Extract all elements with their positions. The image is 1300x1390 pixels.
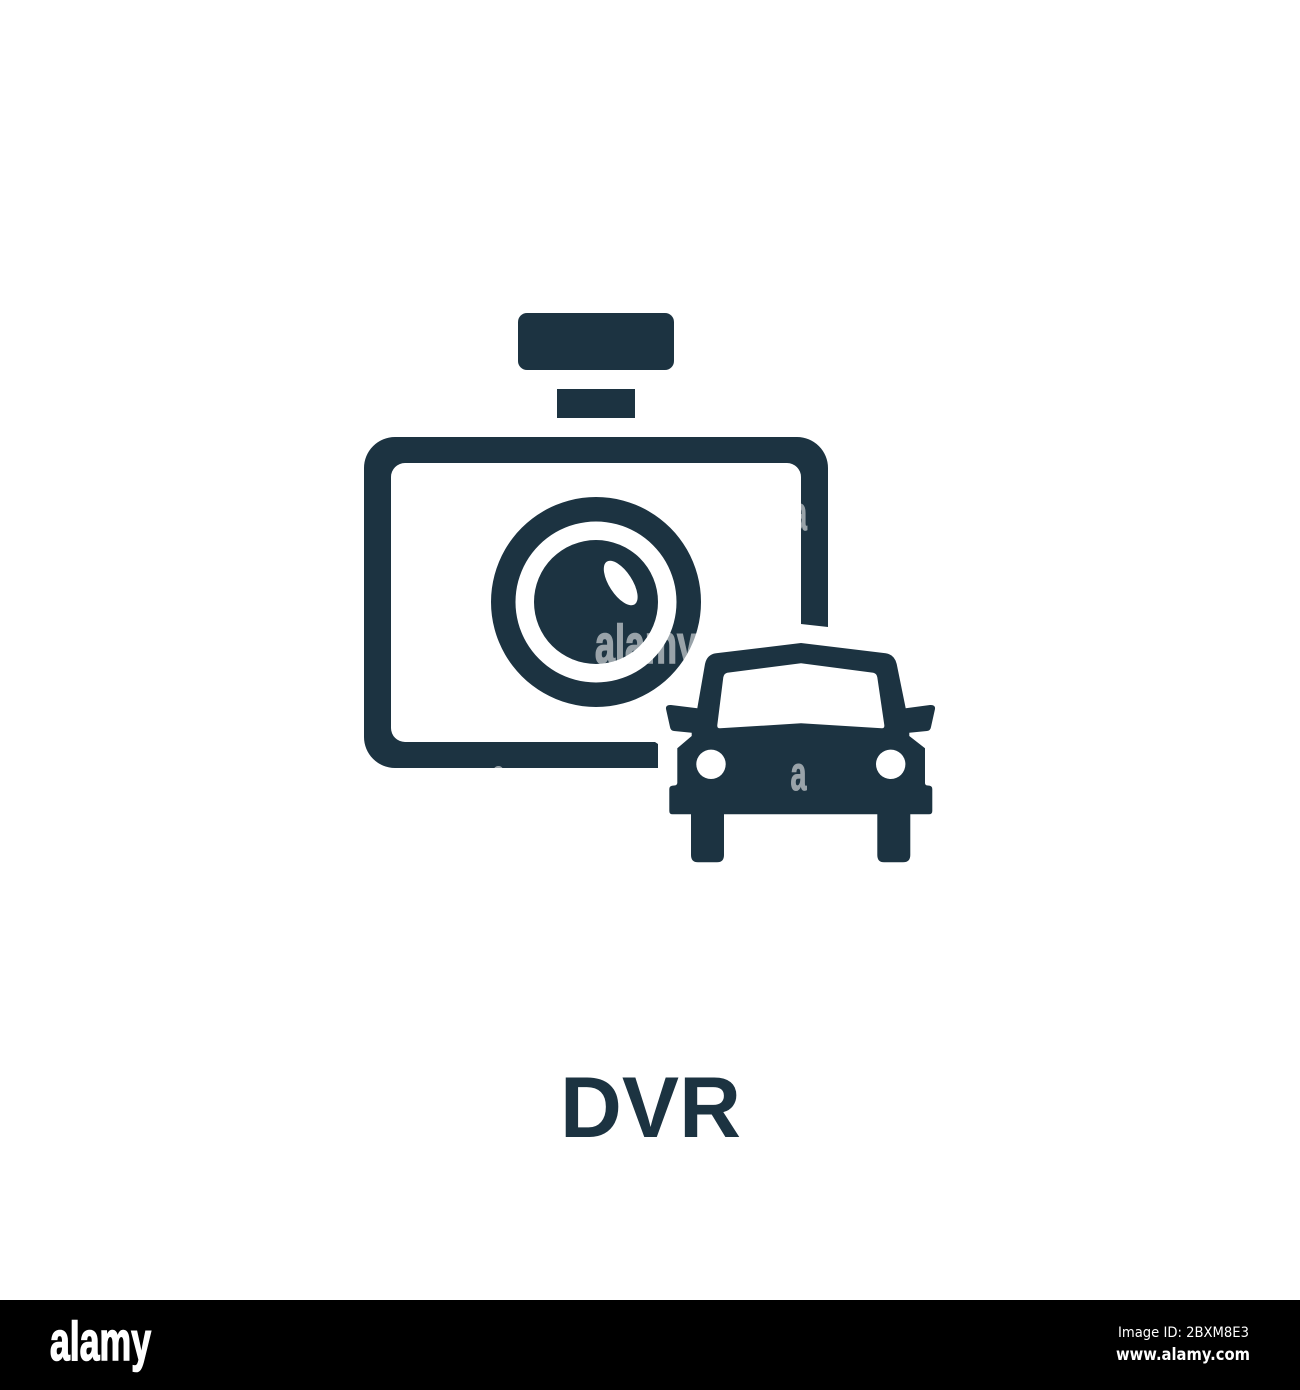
icon: camera mount stem [557,389,635,418]
watermark: alamy over lens: alamy [595,613,697,675]
car windshield [717,663,884,728]
lens outer ring [491,497,701,707]
footer logo: alamy: alamy [50,1310,151,1372]
car body [666,643,935,862]
car left headlight [696,750,726,779]
icon: camera body frame [364,437,828,768]
footer website: www.alamy.com [1116,1345,1250,1365]
car right headlight [876,750,905,779]
lens highlight [597,555,644,611]
footer image id: Image ID: 2BXM8E3 [1118,1325,1249,1341]
watermark: letter on frame bottom: a [491,750,506,803]
watermark: letter on frame right: a [793,488,807,541]
icon: camera lens [491,497,701,707]
icon: DVR dash camera with car [364,313,935,862]
title: DVR: DVR [560,1060,741,1156]
lens centre [534,540,658,664]
icon: car front view [666,643,935,862]
icon: camera mount top [518,313,674,370]
watermark: letter on car: a [790,748,807,801]
footer background [0,1300,1300,1390]
footer bar [0,1300,1300,1390]
